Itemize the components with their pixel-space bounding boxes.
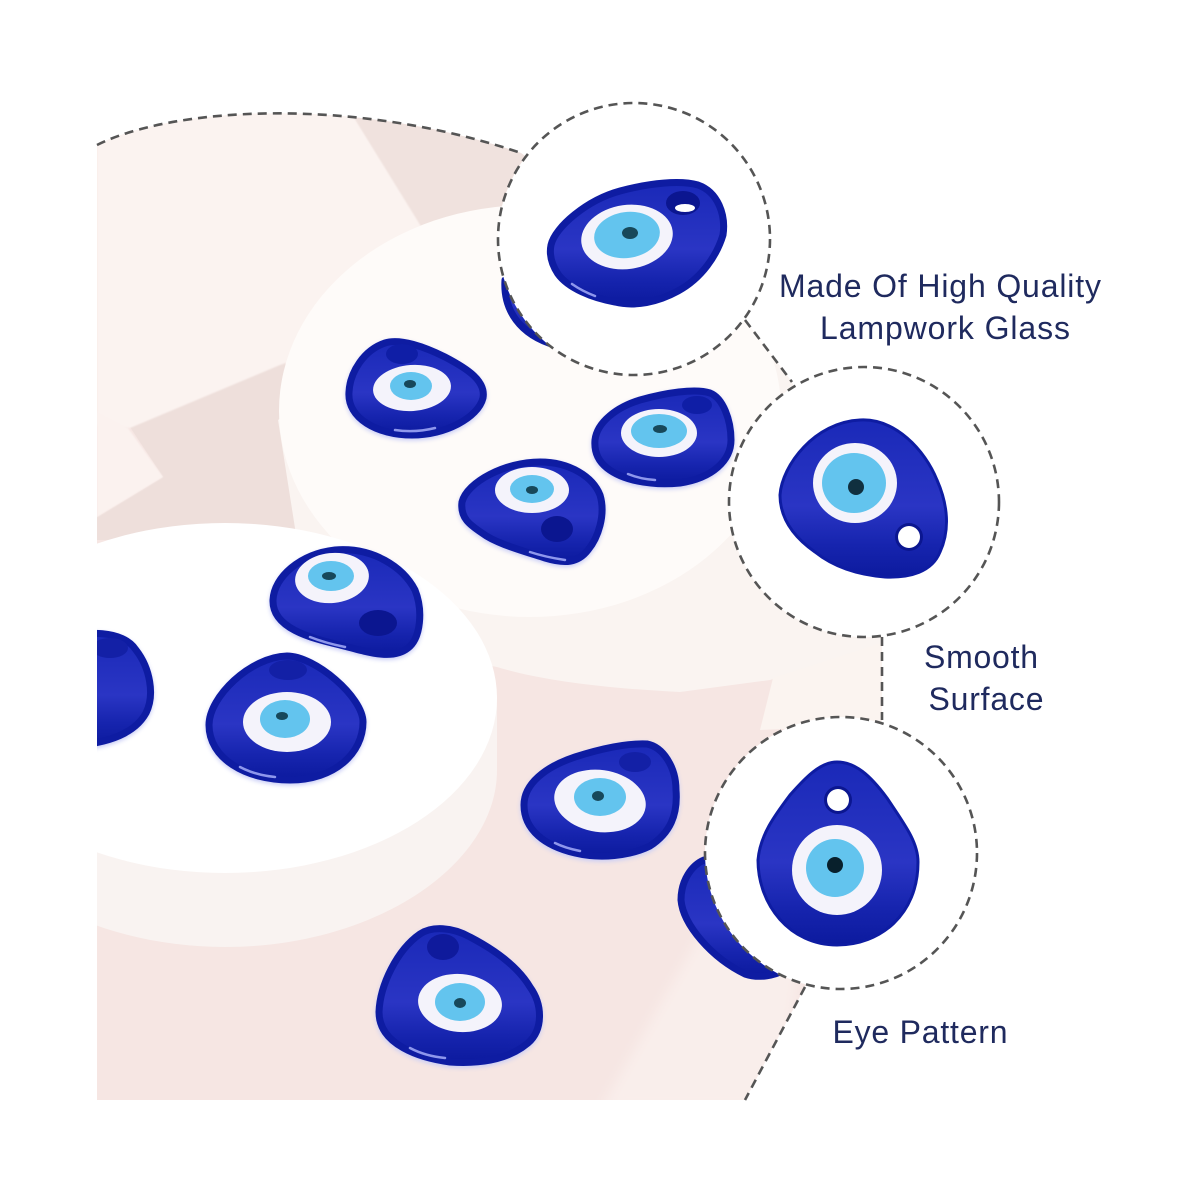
eye pendant behind top callout (501, 277, 549, 347)
pendant hole (666, 191, 700, 215)
dashed connector to eye pattern callout (881, 637, 883, 720)
pink corner above upper disc (358, 118, 524, 155)
eye pendant lower disc top (273, 549, 420, 654)
dashed photo outline top (97, 113, 521, 153)
pink floor backdrop (97, 146, 806, 1100)
label: smooth surface: Surface (928, 681, 1044, 717)
label: smooth surface (924, 639, 1044, 717)
eye pendant upper disc front (462, 462, 602, 562)
pendant eye (792, 825, 882, 915)
eye pendant cropped left (97, 630, 156, 750)
label: made of high quality lampwork glass (779, 268, 1101, 346)
eye pendant on floor front (379, 929, 540, 1062)
label: made of high quality lampwork glass: Lampwork Glass (820, 310, 1070, 346)
eye pendant lower disc centre (209, 656, 363, 780)
eye pendant upper disc left (349, 342, 483, 435)
eye pendant on floor right (524, 744, 676, 856)
pendant eye (813, 443, 897, 523)
dashed connector to smooth surface callout (745, 320, 792, 382)
dusty pink shadow band (97, 360, 300, 540)
label: eye pattern: Eye Pattern (832, 1014, 1008, 1050)
product photo scene (97, 114, 882, 1100)
cream block between callouts (760, 640, 890, 730)
pendant body (780, 420, 946, 577)
lower white disc side (97, 706, 497, 947)
upper white disc side and cream area to its right (278, 356, 882, 692)
large cream paper card (97, 100, 430, 428)
pendant eye (577, 199, 677, 275)
lighter floor glow lower right (600, 900, 800, 1110)
dashed connector to photo bottom (745, 987, 805, 1100)
eye pendant upper disc right (595, 391, 731, 484)
pendant body (550, 183, 724, 304)
label: made of high quality lampwork glass: Made Of High Quality (779, 268, 1101, 304)
eye pendant behind bottom callout (681, 860, 790, 976)
callout: eye pattern pendant (705, 717, 977, 989)
lower white disc top (97, 523, 497, 873)
pendant hole (824, 786, 852, 814)
label: smooth surface: Smooth (924, 639, 1038, 675)
callout: lampwork glass pendant (498, 103, 770, 375)
pendant hole (895, 523, 923, 551)
callout: smooth surface pendant (729, 367, 999, 637)
upper white disc top (279, 206, 744, 419)
small cream card (98, 426, 162, 516)
pendant body (758, 762, 918, 945)
